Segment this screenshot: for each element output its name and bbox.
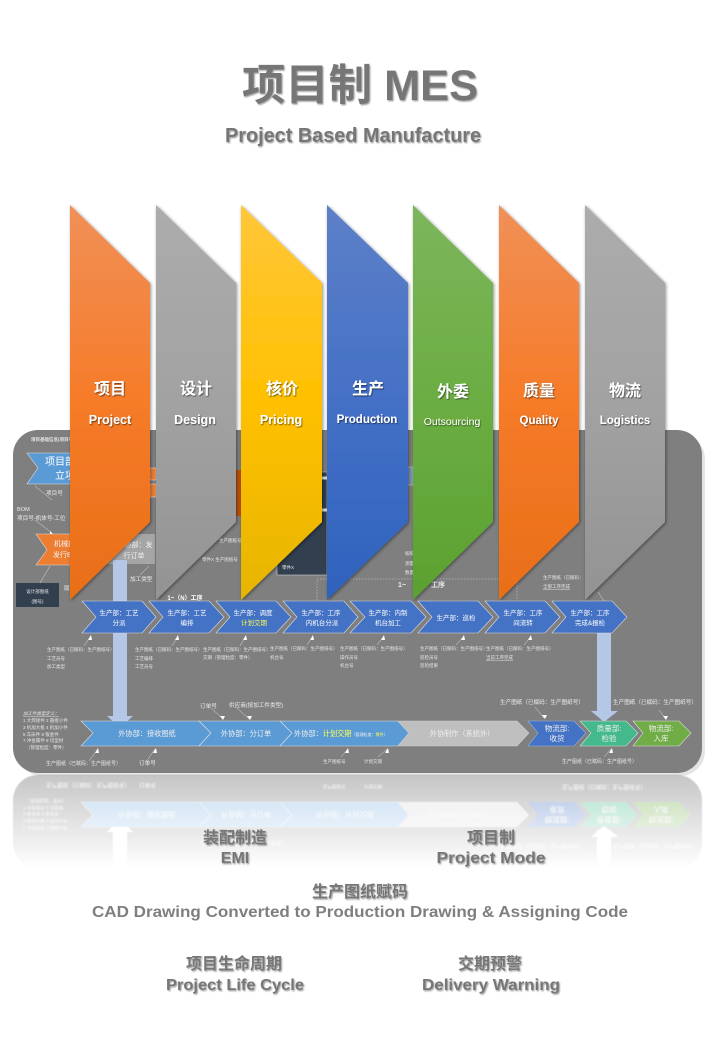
- label: assembly manufacturing: [203, 829, 267, 867]
- label: delivery warning: 交期预警: [458, 954, 522, 973]
- label: project life cycle: Project Life Cycle: [166, 977, 304, 994]
- notes around outsourcing chevrons: 供应商(按加工件类型): [229, 701, 283, 709]
- label: project mode: [436, 829, 546, 867]
- step: warehousing: 物流部:: [649, 723, 673, 733]
- step: process planning: [149, 601, 224, 633]
- column: logistics: [585, 205, 665, 600]
- step: completion: 完成&报检: [575, 618, 606, 627]
- notes between columns: 按照: [405, 550, 414, 557]
- step: quality inspection: 质量部:: [597, 723, 621, 733]
- step: machine dispatch: [283, 601, 358, 633]
- reflection of the process panel: 外协部：计划交期: [316, 810, 374, 819]
- step: logistics receiving: 收货: [550, 733, 565, 743]
- note: processed part type definition: [23, 711, 68, 751]
- label: assembly manufacturing: 装配制造: [203, 829, 267, 847]
- chevron: issue order: [105, 534, 155, 583]
- reflection of the process panel: 7 冲金属件 8 切型材: [23, 804, 64, 811]
- label: CAD drawing conversion: 生产图纸赋码: [312, 882, 408, 901]
- notes around outsourcing chevrons: 生产图纸号: [323, 758, 346, 765]
- step: machining: 机台加工: [375, 618, 402, 627]
- label: project mode: Project Mode: [436, 850, 546, 867]
- column: logistics: Logistics: [600, 415, 650, 427]
- step: schedule: 生产部：调度: [234, 608, 273, 617]
- top-left: project department start: BOM: [17, 507, 30, 513]
- reflection of the process panel: 入库: [654, 805, 669, 815]
- notes under production steps: 生产图纸（已赋码：生产图纸号）: [135, 646, 202, 653]
- label: CAD drawing conversion: [92, 882, 628, 921]
- reflection of the process panel: 3 机加大板 4 机加小件: [23, 817, 68, 824]
- label: delivery warning: [422, 954, 560, 994]
- step: process planning: 生产部：工艺: [168, 608, 207, 617]
- label: assembly manufacturing: EMI: [221, 850, 249, 867]
- notes under production steps: 生产图纸（已赋码：生产图纸号）: [420, 645, 488, 652]
- notes under production steps: 操作员号: [340, 654, 358, 661]
- label: CAD drawing conversion: CAD Drawing Converted to Production Drawing & Assigning Code: [92, 904, 628, 921]
- step: schedule: 计划交期: [241, 618, 268, 627]
- reflection of the process panel: 生产图纸（已赋码：生产图纸号）: [46, 781, 130, 789]
- step: external manufacturing: 外协制作（系统外）: [430, 729, 494, 738]
- notes under production steps: 当前工序完成: [486, 654, 513, 661]
- notes under production steps: 机台号: [340, 662, 354, 669]
- top-left: project department start: (图号): [32, 599, 44, 605]
- step: planned delivery: [280, 721, 409, 746]
- step: patrol inspection: 生产部：巡检: [436, 613, 476, 622]
- column: production: [327, 205, 408, 600]
- outsourcing and logistics chevrons: [81, 721, 691, 746]
- reflection of the process panel: 1 大焊接件 2 圆接小件: [23, 824, 68, 831]
- reflection of the process panel: 外协部：分订单: [221, 810, 271, 819]
- note: processed part type definition: （管理粒度：零件）: [26, 744, 66, 751]
- notes under production steps: 加工类型: [47, 663, 65, 670]
- notes around outsourcing chevrons: [46, 698, 697, 767]
- notes around outsourcing chevrons: 生产图纸（已赋码：生产图纸号）: [613, 698, 697, 706]
- top-left: project department start: 立项: [55, 469, 75, 482]
- reflection of the process panel: 物流部:: [649, 815, 673, 825]
- arrow: completion to quality: [591, 633, 618, 722]
- step: patrol inspection: [418, 601, 493, 633]
- notes under production steps: 交期（管理粒度：零件）: [203, 654, 252, 661]
- top-left: project department start: 发行BOM: [53, 550, 83, 559]
- step: process dispatch: [82, 601, 156, 633]
- top-left: project department start: 项目号-机体号-工位: [17, 514, 66, 522]
- chevron: issue order: 加工类型: [130, 575, 153, 583]
- column: project: 项目: [94, 381, 126, 398]
- reflection of the process panel: [12, 774, 702, 854]
- notes under production steps: 工艺员号: [135, 664, 153, 670]
- step: process planning: 编排: [180, 618, 194, 627]
- notes between columns: 全部工序完成: [543, 583, 570, 590]
- notes between columns: 测量: [405, 560, 414, 567]
- top-left: project department start: [16, 436, 83, 607]
- top-left: project department start: 项目基础信息(项目号): [31, 436, 75, 443]
- column: outsourcing: [413, 205, 493, 600]
- step: completion: 生产部：工序: [570, 608, 610, 617]
- note: processed part type definition: 1 大焊接件 2 圆接小件: [23, 717, 68, 724]
- chevron: issue order: 行订单: [124, 551, 144, 560]
- step: process dispatch: 分派: [112, 618, 126, 627]
- step: logistics receiving: [528, 721, 586, 746]
- step: schedule: [216, 601, 291, 633]
- chevron: issue order: 外协部：发: [118, 540, 152, 549]
- note: processed part type definition: 5 车床件 6 钣金件: [23, 731, 59, 738]
- reflection of the process panel: 计划交期: [364, 783, 382, 790]
- step: quality inspection: [580, 721, 638, 746]
- column: production: 生产: [352, 380, 384, 398]
- notes around outsourcing chevrons: 生产图纸（已赋码：生产图纸号）: [562, 758, 637, 765]
- step: warehousing: [633, 721, 691, 746]
- step: transfer: [485, 601, 560, 633]
- column: quality: 质量: [523, 381, 555, 400]
- label: project mode: 项目制: [467, 829, 515, 847]
- top-left: project department start: 项目部: [45, 455, 75, 468]
- notes between columns: 1~: [398, 582, 406, 589]
- notes around outsourcing chevrons: 生产图纸（已赋码：生产图纸号）: [46, 760, 121, 767]
- notes under production steps: 生产图纸（已赋码：生产图纸号）: [486, 645, 554, 652]
- reflection of the process panel: 5 车床件 6 钣金件: [23, 810, 59, 817]
- label: delivery warning: Delivery Warning: [422, 977, 560, 994]
- columns: department banners: [70, 205, 665, 600]
- column: outsourcing: Outsourcing: [424, 416, 480, 428]
- arrow: production to outsourcing: [107, 560, 133, 728]
- reflection of the process panel: （管理粒度：零件）: [26, 797, 66, 804]
- step: machining: 生产部：内制: [368, 608, 408, 617]
- step: external manufacturing: [398, 721, 529, 746]
- note: processed part type definition: 加工件类型定义：: [23, 711, 59, 716]
- notes between columns: 零件X 生产图纸号: [202, 556, 238, 563]
- reflection of the process panel: 生产图纸（已赋码：生产图纸号）: [562, 783, 646, 791]
- step: transfer: 间流转: [513, 618, 533, 627]
- notes under production steps: 巡检结果: [420, 662, 438, 669]
- column: design: Design: [174, 413, 216, 427]
- column: design: [156, 205, 236, 600]
- reflection of the process panel: 收货: [550, 805, 565, 815]
- notes under production steps: 生产图纸（已赋码：生产图纸号）: [203, 646, 270, 653]
- production process chevrons: [82, 601, 627, 633]
- notes between columns: 1~（N）工序: [167, 594, 203, 602]
- notes around outsourcing chevrons: 计划交期: [364, 758, 382, 765]
- reflection of the process panel: 外协制作（系统外）: [430, 810, 494, 819]
- step: split order: [199, 721, 292, 746]
- notes between columns: 生产图纸号: [219, 537, 242, 544]
- step: receive drawings: [81, 721, 211, 746]
- notes around outsourcing chevrons: 订单号: [139, 759, 156, 767]
- column: production: Production: [337, 414, 397, 426]
- notes under production steps: 生产图纸（已赋码：生产图纸号）: [47, 646, 114, 653]
- top-left: project department start: 机械部:: [54, 539, 77, 548]
- step: split order: 外协部：分订单: [221, 729, 271, 738]
- panel: process flow background: [13, 430, 705, 776]
- step: completion: [552, 601, 627, 633]
- title: [225, 62, 481, 147]
- notes between columns: 工序: [431, 580, 445, 589]
- reflection of the process panel: 生产图纸号: [323, 783, 346, 790]
- notes between columns: [167, 537, 604, 603]
- note: processed part type definition: 3 机加大板 4 机加小件: [23, 724, 68, 731]
- column: project: Project: [89, 413, 132, 427]
- step: planned delivery: 外协部：计划交期（管理粒度：零件）: [294, 729, 388, 738]
- column: quality: Quality: [520, 415, 559, 427]
- reflection of the process panel: 质量部:: [597, 815, 621, 825]
- notes around outsourcing chevrons: 生产图纸（已赋码：生产图纸号）: [500, 698, 584, 706]
- step: machine dispatch: 内机台分派: [306, 618, 339, 627]
- label: project life cycle: 项目生命周期: [186, 954, 282, 973]
- label: project life cycle: [166, 954, 304, 994]
- column: logistics: 物流: [609, 381, 641, 400]
- column: quality: [499, 205, 579, 600]
- reflection of the process panel: 外协部：接收图纸: [118, 810, 176, 819]
- reflection of the process panel: 供应商(按加工件类型): [229, 839, 283, 847]
- notes under production steps: 生产图纸（已赋码：生产图纸号）: [340, 645, 408, 652]
- notes between columns: 数量: [405, 569, 414, 576]
- reflection of the process panel: 生产图纸（已赋码：生产图纸号）: [500, 842, 584, 850]
- step: logistics receiving: 物流部:: [545, 723, 569, 733]
- step: warehousing: 入库: [654, 733, 669, 743]
- step: receive drawings: 外协部：接收图纸: [118, 729, 176, 738]
- top-left: project department start: 设计部图纸: [26, 588, 49, 595]
- step: machining: [350, 601, 426, 633]
- notes between columns: 生产图纸（已赋码：: [543, 574, 584, 581]
- step: transfer: 生产部：工序: [504, 608, 543, 617]
- column: pricing: Pricing: [260, 413, 302, 427]
- step: quality inspection: 检验: [602, 733, 617, 743]
- small hidden-behind boxes between columns: 零件X: [282, 564, 294, 571]
- top-left: project department start: 项目号: [46, 490, 63, 497]
- column: project: [70, 205, 150, 600]
- notes under production steps: 工艺员号: [47, 656, 65, 662]
- note: processed part type definition: 7 冲金属件 8 切型材: [23, 737, 64, 744]
- small hidden-behind boxes between columns: [150, 467, 413, 575]
- notes under production steps: 工艺编排: [135, 655, 153, 662]
- reflection of the process panel: 订单号: [139, 781, 156, 789]
- reflection of the process panel: 订单号: [200, 838, 217, 846]
- column: pricing: [241, 205, 322, 600]
- column: pricing: 核价: [266, 379, 298, 398]
- notes under production steps: 机台号: [270, 654, 284, 661]
- notes under production steps: 巡检员号: [420, 654, 438, 661]
- column: outsourcing: 外委: [437, 382, 469, 401]
- notes under production steps: [47, 635, 554, 670]
- step: machine dispatch: 生产部：工序: [302, 608, 341, 617]
- column: design: 设计: [180, 380, 212, 398]
- reflection of the process panel: 检验: [602, 805, 617, 815]
- notes around outsourcing chevrons: 订单号: [200, 702, 217, 710]
- title: Project Based Manufacture: [225, 125, 481, 147]
- reflection of the process panel: 物流部:: [545, 815, 569, 825]
- title: 项目制 MES: [242, 62, 478, 110]
- step: process dispatch: 生产部：工艺: [100, 608, 139, 617]
- reflection of the process panel: 生产图纸（已赋码：生产图纸号）: [613, 842, 697, 850]
- top-left: project department start: 版: [64, 584, 70, 592]
- notes under production steps: 生产图纸（已赋码：生产图纸号）: [270, 645, 338, 652]
